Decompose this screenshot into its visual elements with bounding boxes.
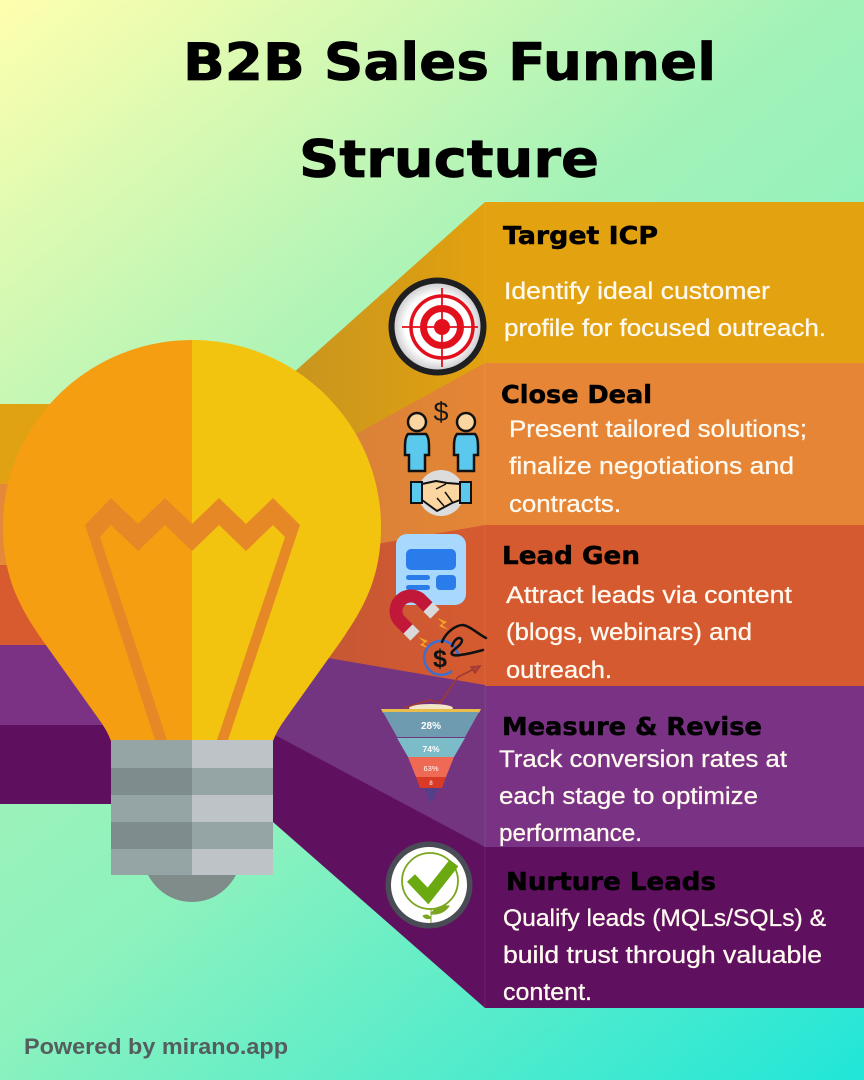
funnel tiers: 63%	[423, 764, 439, 773]
text: Close Deal description: finalize negotiations and	[509, 453, 794, 480]
heading: Nurture Leads: Nurture Leads	[506, 867, 716, 896]
text: Lead Gen description: Attract leads via content	[506, 582, 792, 609]
footer credit: Powered by mirano.app	[24, 1034, 288, 1059]
icon: lead generation	[396, 534, 486, 675]
panel: Target ICP	[485, 202, 864, 364]
magnet	[396, 596, 435, 636]
icon: check badge	[386, 842, 472, 928]
text: Close Deal description: Present tailored solutions;	[509, 416, 807, 443]
text: Lead Gen description: outreach.	[506, 657, 612, 684]
text: Measure & Revise description	[499, 746, 787, 847]
hand	[442, 625, 486, 655]
text: Measure & Revise description: each stage to optimize	[499, 783, 758, 810]
bulb base	[111, 740, 273, 875]
funnel tiers: 28%	[421, 721, 441, 732]
funnel tiers	[383, 712, 479, 788]
text: Measure & Revise description: performance.	[499, 820, 642, 847]
web page card	[396, 534, 466, 605]
title: B2B Sales Funnel	[183, 33, 716, 93]
heading: Measure & Revise: Measure & Revise	[502, 712, 762, 741]
funnel tiers: 74%	[422, 744, 440, 754]
text: Nurture Leads description: Qualify leads (MQLs/SQLs) &	[503, 905, 826, 932]
light bulb	[3, 340, 381, 902]
panel: Lead Gen	[485, 525, 864, 686]
left colour bands behind bulb	[0, 404, 200, 804]
growth arrow	[403, 666, 480, 708]
person right	[454, 413, 478, 471]
text: Measure & Revise description: Track conversion rates at	[499, 746, 787, 773]
heading: Lead Gen: Lead Gen	[502, 541, 640, 570]
icon: target	[388, 278, 486, 376]
perspective connectors	[200, 202, 485, 1008]
title: Structure	[299, 130, 599, 190]
text: Nurture Leads description	[503, 905, 826, 1006]
text: Target ICP description: profile for focused outreach.	[504, 315, 826, 342]
person left	[405, 413, 429, 471]
coin ring: $	[433, 645, 447, 673]
text: Target ICP description	[504, 278, 826, 342]
dollar sign: $	[433, 397, 449, 427]
title	[183, 33, 716, 190]
sparks	[418, 618, 449, 649]
funnel rim	[381, 704, 481, 713]
heading: Target ICP: Target ICP	[503, 221, 658, 250]
filament	[85, 498, 300, 740]
text: Target ICP description: Identify ideal customer	[504, 278, 770, 305]
bulb tip	[148, 875, 236, 902]
icon: close deal handshake	[405, 397, 478, 516]
heading: Close Deal: Close Deal	[501, 380, 652, 409]
panel: Measure & Revise	[485, 686, 864, 848]
bulb glass	[3, 340, 381, 741]
text: Nurture Leads description: content.	[503, 979, 592, 1006]
coin ring	[424, 641, 458, 675]
handshake	[411, 470, 471, 516]
panel: Close Deal	[485, 363, 864, 526]
text: Lead Gen description	[506, 582, 792, 684]
text: Nurture Leads description: build trust through valuable	[503, 942, 822, 969]
funnel shadow tip	[423, 786, 439, 804]
text: Close Deal description	[509, 416, 807, 518]
text: Close Deal description: contracts.	[509, 491, 621, 518]
text: Lead Gen description: (blogs, webinars) and	[506, 619, 752, 646]
funnel tiers: 8	[429, 781, 433, 787]
icon: funnel chart	[381, 666, 481, 804]
panel: Nurture Leads	[485, 847, 864, 1008]
